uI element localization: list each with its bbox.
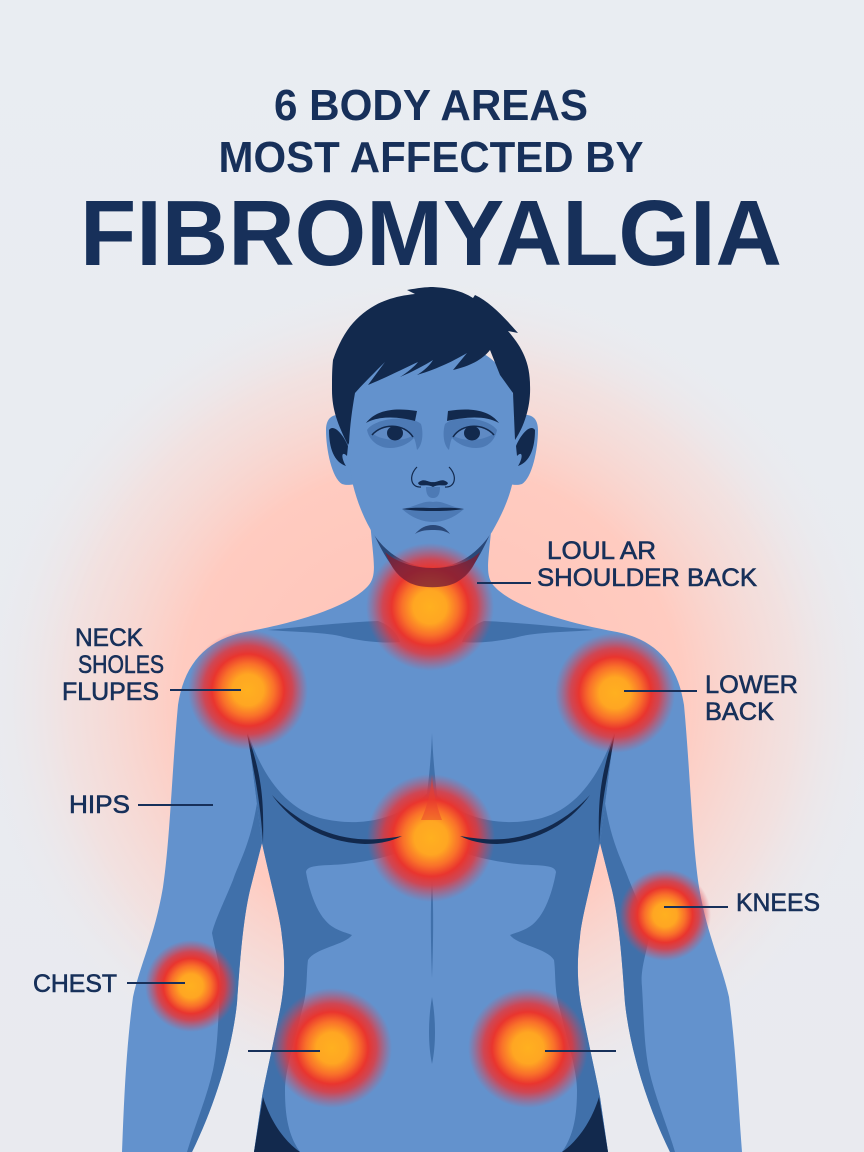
label: hips: HIPS [69, 791, 130, 819]
torso right shadow [431, 733, 614, 1152]
eye shadows [367, 418, 497, 450]
hotspot: left arm [145, 940, 237, 1032]
title line 3: FIBROMYALGIA [80, 181, 782, 285]
left arm shadow [187, 733, 262, 1152]
mouth line [402, 508, 464, 511]
hotspot: right shoulder [555, 633, 675, 753]
label: right shoulder [705, 671, 798, 726]
hotspot: chest [367, 774, 495, 902]
label: left shoulder [62, 624, 164, 706]
chest centre crease over glow [421, 775, 442, 820]
lips [402, 502, 464, 522]
title line 1: 6 BODY AREAS [274, 81, 588, 130]
centre line, navel [424, 733, 440, 1064]
hair [332, 287, 530, 445]
neck shadow over glow [385, 552, 480, 587]
label: top right: LOUL AR [547, 537, 656, 565]
hotspot: right arm [619, 869, 711, 961]
label: left shoulder: FLUPES [62, 678, 159, 706]
leader lines [127, 583, 728, 1051]
title [80, 81, 782, 285]
title line 2: MOST AFFECTED BY [218, 133, 644, 182]
hotspot: right hip [468, 988, 588, 1108]
label: left shoulder: SHOLES [78, 651, 164, 679]
under lip [415, 525, 450, 534]
eyebrows [366, 410, 499, 423]
eyelids [372, 426, 494, 437]
hotspot: neck [366, 543, 494, 671]
label: right shoulder: BACK [705, 698, 774, 726]
underwear [254, 1097, 608, 1152]
hotspot: left hip [272, 988, 392, 1108]
head [350, 340, 514, 568]
ear details [329, 428, 535, 466]
neck shadow [372, 530, 492, 587]
hotspot: left shoulder [188, 630, 308, 750]
label: top right [537, 537, 757, 592]
irises [387, 426, 480, 441]
label: top right: SHOULDER BACK [537, 564, 757, 592]
label: knees: KNEES [736, 889, 820, 917]
human figure [122, 287, 742, 1152]
torso left shadow [248, 733, 431, 1152]
body silhouette [122, 520, 742, 1152]
right arm shadow [600, 733, 675, 1152]
chest lines [272, 795, 590, 844]
dark arm creases [247, 733, 615, 843]
collarbones [268, 621, 594, 643]
eye whites [373, 427, 493, 440]
red background glow [0, 270, 864, 1130]
label: right shoulder: LOWER [705, 671, 798, 699]
ears [326, 415, 538, 485]
label: left shoulder: NECK [75, 624, 143, 652]
nose outline [412, 467, 454, 487]
nostrils [418, 480, 448, 487]
nose [426, 487, 440, 498]
label: chest: CHEST [33, 970, 117, 998]
